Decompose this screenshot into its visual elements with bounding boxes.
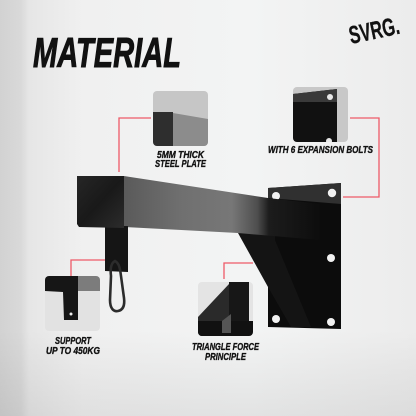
wall plate: [268, 183, 341, 329]
panel: steel plate callout: [119, 91, 208, 172]
beam side: [124, 176, 320, 240]
title: MATERIAL: [33, 29, 181, 76]
hanging tab: [105, 226, 128, 272]
panel: load support callout: [45, 260, 105, 357]
diagonal brace: [238, 233, 311, 327]
caption: triangle force: TRIANGLE FORCE: [192, 341, 260, 353]
thumbnail: triangle brace: [198, 282, 253, 336]
connector: triangle force: [224, 263, 253, 279]
caption: steel plate: [155, 149, 207, 170]
caption: load support: UP TO 450KG: [46, 345, 100, 357]
caption: triangle force: [192, 341, 260, 363]
bracket: [77, 176, 341, 329]
thumbnail: steel plate corner: [153, 91, 208, 146]
panel: expansion bolts callout: [268, 87, 379, 197]
connector: expansion bolts: [343, 118, 379, 197]
panel: triangle force callout: [192, 263, 260, 363]
carabiner: [110, 261, 124, 311]
caption: load support: SUPPORT: [55, 335, 92, 347]
thumbnail: plate with bolt hole: [293, 87, 348, 144]
caption: expansion bolts: WITH 6 EXPANSION BOLTS: [268, 144, 373, 156]
thumbnail: hanging tab: [45, 276, 100, 331]
bolt holes: [272, 189, 336, 326]
caption: triangle force: PRINCIPLE: [205, 351, 247, 363]
caption: steel plate: 5MM THICK: [157, 149, 205, 161]
beam front: [77, 176, 124, 228]
caption: load support: [46, 335, 100, 357]
connector: load support: [71, 260, 105, 276]
caption: steel plate: STEEL PLATE: [155, 158, 207, 170]
connector: steel plate: [119, 118, 151, 172]
